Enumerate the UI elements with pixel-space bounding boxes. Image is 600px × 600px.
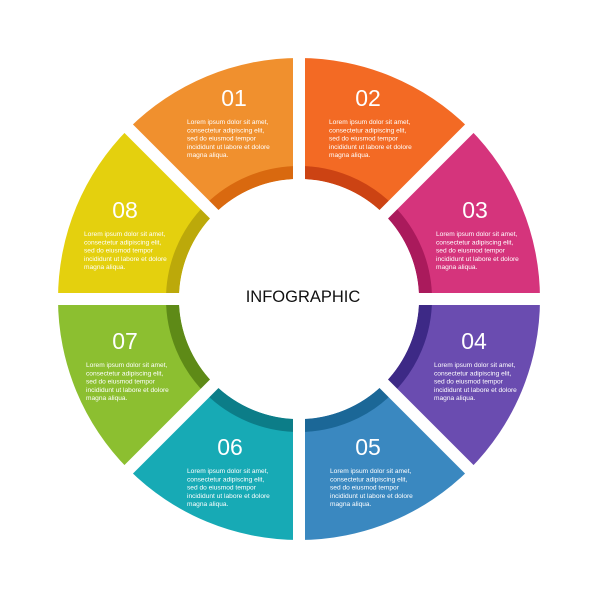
- label 06: incididunt ut labore et dolore: [187, 493, 270, 500]
- label 08: sed do eiusmod tempor: [84, 248, 154, 255]
- label 04: magna aliqua.: [434, 395, 476, 402]
- label 04: consectetur adipiscing elit,: [434, 370, 512, 377]
- label 05: 05: [355, 434, 381, 460]
- label 04: sed do eiusmod tempor: [434, 379, 504, 386]
- label 03: [436, 197, 519, 271]
- label 07: consectetur adipiscing elit,: [86, 370, 164, 377]
- label 06: Lorem ipsum dolor sit amet,: [187, 468, 269, 475]
- segment 06: [129, 384, 299, 540]
- label 01: sed do eiusmod tempor: [187, 136, 257, 143]
- label 03: magna aliqua.: [436, 264, 478, 271]
- label 07: [86, 328, 169, 402]
- label 02: 02: [355, 85, 381, 111]
- segment 01: [129, 58, 299, 214]
- label 02: consectetur adipiscing elit,: [329, 127, 407, 134]
- label 05: Lorem ipsum dolor sit amet,: [330, 468, 412, 475]
- label 07: 07: [112, 328, 138, 354]
- label 08: incididunt ut labore et dolore: [84, 256, 167, 263]
- label 06: 06: [217, 434, 243, 460]
- label 08: magna aliqua.: [84, 264, 126, 271]
- label 08: [84, 197, 167, 271]
- label 02: sed do eiusmod tempor: [329, 136, 399, 143]
- label 02: incididunt ut labore et dolore: [329, 144, 412, 151]
- label 01: incididunt ut labore et dolore: [187, 144, 270, 151]
- label 03: 03: [462, 197, 488, 223]
- label 07: Lorem ipsum dolor sit amet,: [86, 362, 168, 369]
- label 05: magna aliqua.: [330, 501, 372, 508]
- label 08: consectetur adipiscing elit,: [84, 239, 162, 246]
- label 06: sed do eiusmod tempor: [187, 485, 257, 492]
- label 01: Lorem ipsum dolor sit amet,: [187, 119, 269, 126]
- label 01: magna aliqua.: [187, 152, 229, 159]
- label 04: 04: [461, 328, 487, 354]
- label 06: consectetur adipiscing elit,: [187, 476, 265, 483]
- label 01: consectetur adipiscing elit,: [187, 127, 265, 134]
- label 03: incididunt ut labore et dolore: [436, 256, 519, 263]
- label 05: sed do eiusmod tempor: [330, 485, 400, 492]
- segment 04: [384, 299, 540, 469]
- label 05: incididunt ut labore et dolore: [330, 493, 413, 500]
- segment 02: [299, 58, 469, 214]
- label 08: 08: [112, 197, 138, 223]
- label 01: [187, 85, 270, 159]
- label 05: [330, 434, 413, 508]
- label 03: sed do eiusmod tempor: [436, 248, 506, 255]
- label 03: consectetur adipiscing elit,: [436, 239, 514, 246]
- label 06: magna aliqua.: [187, 501, 229, 508]
- label 02: [329, 85, 412, 159]
- title: INFOGRAPHIC: [246, 288, 360, 306]
- label 04: Lorem ipsum dolor sit amet,: [434, 362, 516, 369]
- label 07: magna aliqua.: [86, 395, 128, 402]
- label 07: incididunt ut labore et dolore: [86, 387, 169, 394]
- label 04: [434, 328, 517, 402]
- label 06: [187, 434, 270, 508]
- label 02: magna aliqua.: [329, 152, 371, 159]
- label 05: consectetur adipiscing elit,: [330, 476, 408, 483]
- segment 07: [58, 299, 214, 469]
- ring chart: [40, 40, 560, 560]
- label 02: Lorem ipsum dolor sit amet,: [329, 119, 411, 126]
- segment 08: [58, 129, 214, 299]
- label 01: 01: [221, 85, 247, 111]
- label 03: Lorem ipsum dolor sit amet,: [436, 231, 518, 238]
- label 04: incididunt ut labore et dolore: [434, 387, 517, 394]
- label 07: sed do eiusmod tempor: [86, 379, 156, 386]
- segment 03: [384, 129, 540, 299]
- label 08: Lorem ipsum dolor sit amet,: [84, 231, 166, 238]
- segment 05: [299, 384, 469, 540]
